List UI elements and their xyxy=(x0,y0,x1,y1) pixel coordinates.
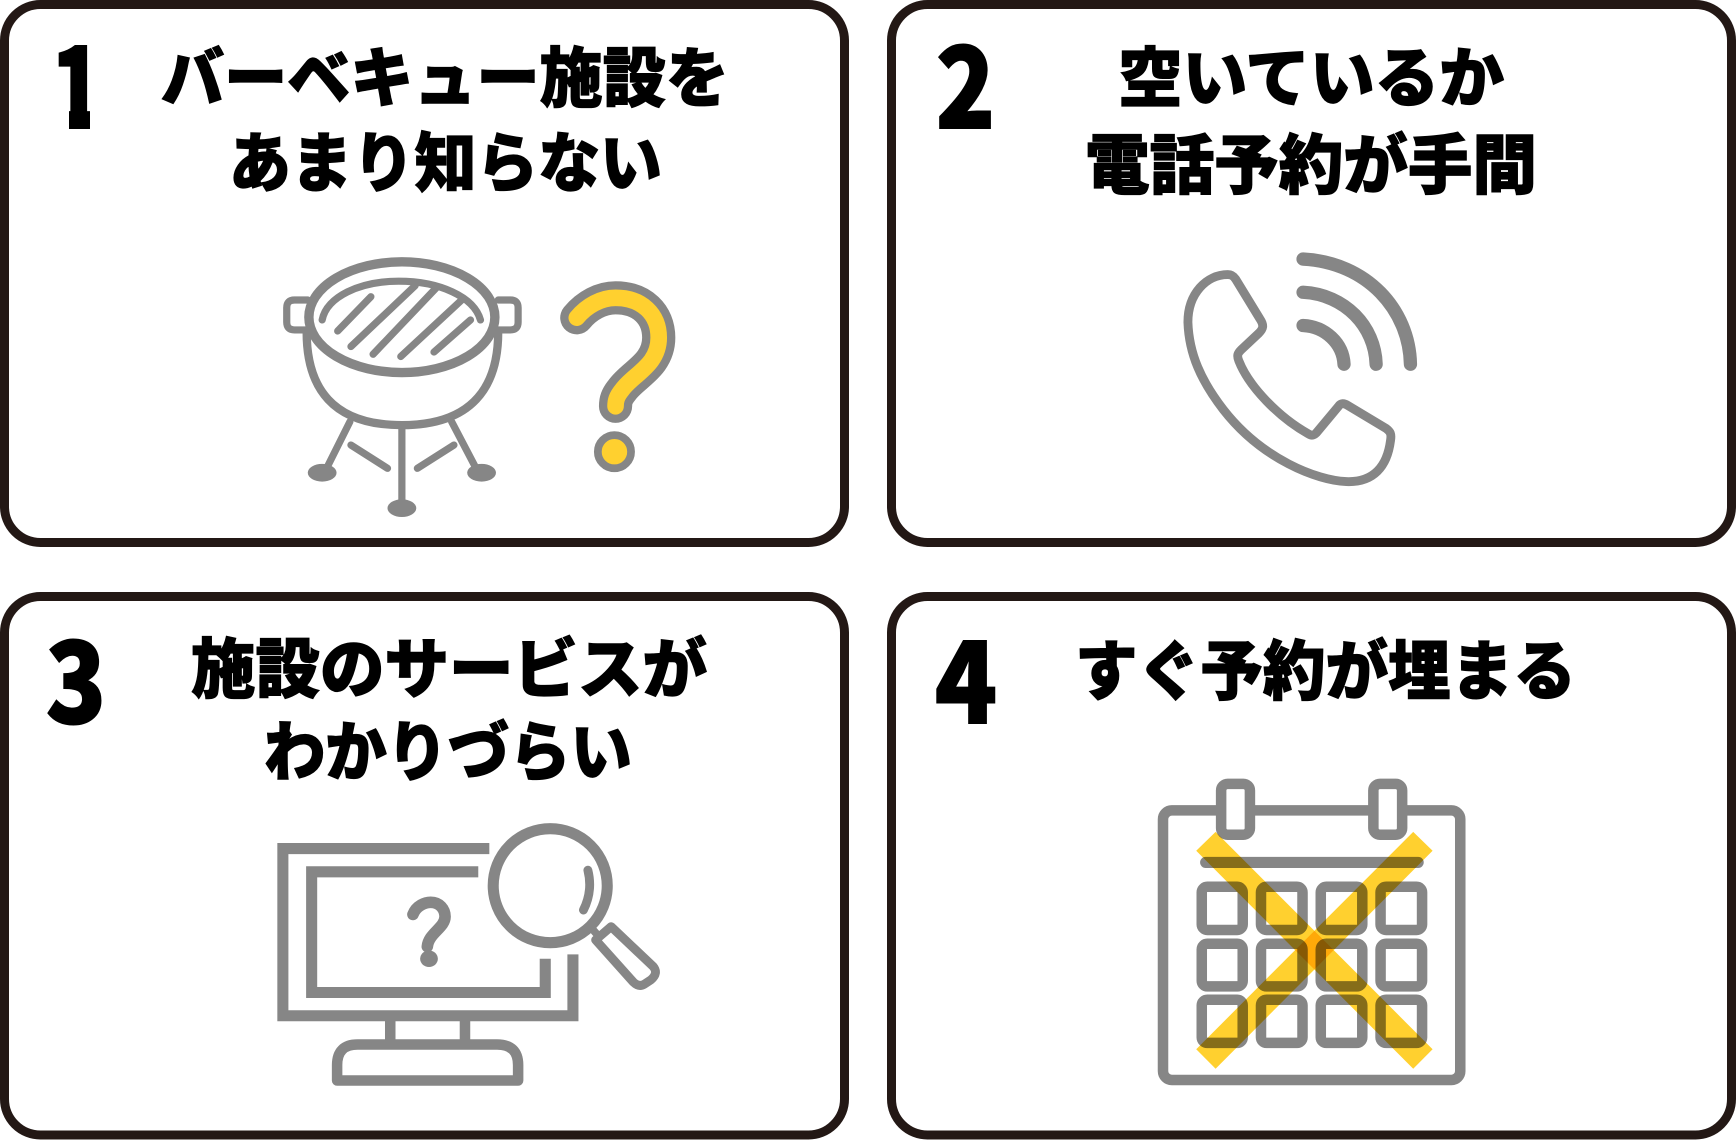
icon: monitor with magnifying glass xyxy=(283,829,655,1081)
number 3: 3 xyxy=(46,595,106,755)
heading 1 xyxy=(161,42,729,200)
panel 1 frame xyxy=(4,4,844,542)
panel 1: little known facilities xyxy=(4,0,844,542)
panel 2 frame xyxy=(892,4,1732,542)
heading 3: 施設のサービスが xyxy=(191,633,707,706)
heading 1: バーベキュー施設を xyxy=(161,42,729,115)
heading 2: 電話予約が手間 xyxy=(1085,129,1537,202)
icon: telephone handset with signal arcs xyxy=(1188,259,1410,482)
panel 2: phone booking is a hassle xyxy=(892,0,1732,542)
number 4: 4 xyxy=(935,595,997,755)
panel 4 frame xyxy=(892,596,1732,1135)
panel 4: bookings fill up quickly xyxy=(892,595,1732,1135)
heading 1: あまり知らない xyxy=(229,127,662,200)
icon: calendar crossed out xyxy=(1163,784,1460,1080)
heading 3: わかりづらい xyxy=(264,716,632,789)
number 1: 1 xyxy=(51,0,103,160)
panel 3: services are hard to understand xyxy=(4,595,844,1135)
icon: yellow question mark xyxy=(577,298,659,468)
heading 2 xyxy=(1085,42,1537,202)
panel 3 frame xyxy=(4,596,844,1135)
heading 3 xyxy=(191,633,707,789)
heading 4: すぐ予約が埋まる xyxy=(1075,635,1576,708)
heading 2: 空いているか xyxy=(1118,42,1504,115)
number 2: 2 xyxy=(936,0,995,160)
icon: barbecue grill xyxy=(287,262,518,517)
